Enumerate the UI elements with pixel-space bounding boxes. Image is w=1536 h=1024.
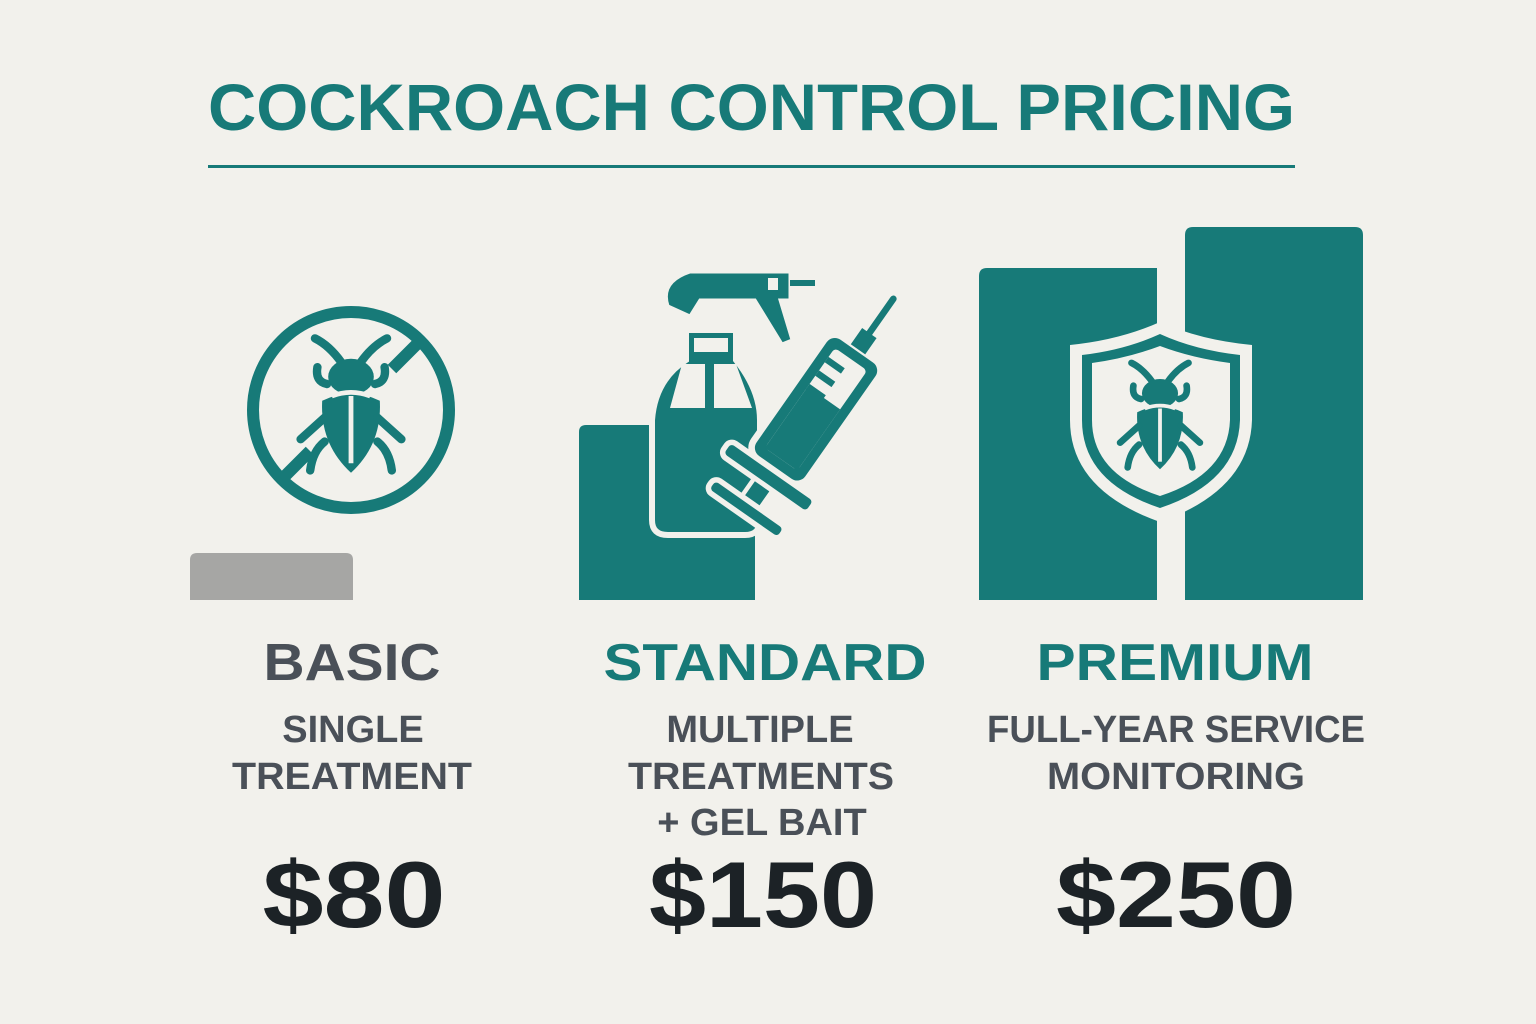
title: COCKROACH CONTROL PRICING	[208, 70, 1295, 144]
panel: standard	[579, 269, 937, 947]
icon: spray bottle	[652, 272, 815, 535]
panel: standard: + GEL BAIT	[657, 802, 867, 844]
label: basic: BASIC	[264, 634, 440, 692]
panel: basic	[190, 312, 472, 947]
panel: premium	[979, 227, 1365, 947]
bars: premium	[979, 268, 1157, 600]
description: basic: SINGLE	[282, 709, 424, 751]
icon: no bug	[253, 312, 449, 508]
panel: premium: MONITORING	[1047, 756, 1305, 798]
label: premium: PREMIUM	[1036, 634, 1314, 692]
panel: standard: TREATMENTS	[628, 756, 894, 798]
label: standard: STANDARD	[604, 634, 926, 692]
icon: shield	[1070, 322, 1252, 522]
icon: syringe	[699, 269, 937, 545]
description: premium: FULL-YEAR SERVICE	[987, 709, 1365, 751]
price: basic: $80	[262, 842, 446, 947]
price: standard: $150	[649, 842, 877, 947]
price: premium: $250	[1056, 842, 1296, 947]
panel: basic: TREATMENT	[232, 756, 472, 798]
bar: basic	[190, 553, 353, 600]
bar: standard	[579, 425, 755, 600]
description: standard: MULTIPLE	[666, 709, 854, 751]
